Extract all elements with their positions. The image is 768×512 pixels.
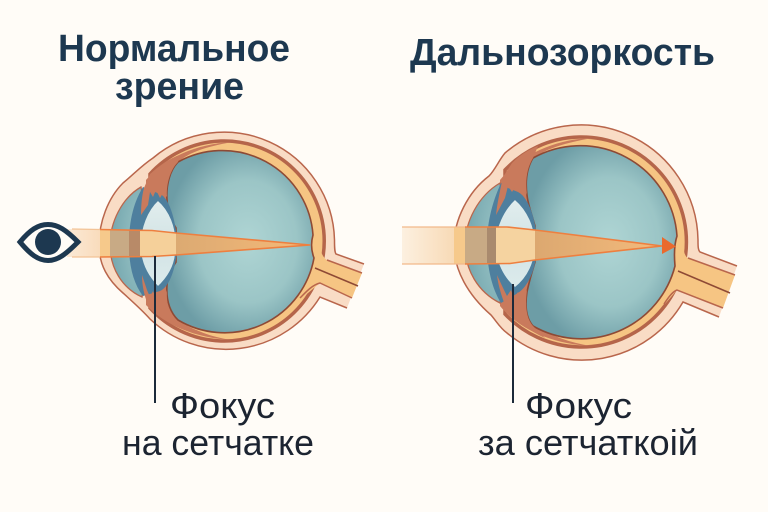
- iris: [129, 187, 177, 296]
- title: farsightedness: Дальнозоркость: [410, 32, 715, 74]
- icon: viewing eye: [20, 224, 78, 260]
- vitreous body: [526, 146, 677, 339]
- optic nerve: [296, 235, 362, 298]
- label: focus behind retina: за сетчаткоій: [478, 422, 698, 463]
- ciliary muscle: upper: [496, 146, 538, 215]
- leader line: normal vision focus: [154, 256, 156, 403]
- light beam: [67, 229, 310, 257]
- ciliary body backing: [500, 138, 592, 346]
- label: focus behind retina: Фокус: [525, 385, 632, 426]
- ciliary muscle: lower: [497, 275, 545, 338]
- label: focus on retina: Фокус: [170, 385, 275, 426]
- sclera: [99, 132, 364, 349]
- choroid ring: [505, 137, 686, 347]
- ciliary muscle: lower: [142, 275, 185, 330]
- cornea and aqueous humour: [110, 187, 150, 297]
- lens: [495, 199, 535, 288]
- leader line: farsightedness focus: [512, 284, 514, 403]
- lens: [140, 200, 176, 287]
- ciliary body backing: [146, 142, 232, 340]
- choroid ring: [150, 141, 324, 341]
- title: normal vision: Нормальное: [58, 28, 290, 70]
- ciliary muscle: upper: [141, 155, 180, 215]
- eye diagram: normal vision: [67, 132, 364, 349]
- cornea and aqueous humour: [465, 183, 508, 303]
- label: focus behind retina: [478, 385, 698, 463]
- sclera: [454, 125, 737, 360]
- optic nerve: [655, 235, 735, 308]
- vitreous body: [167, 151, 314, 333]
- eye diagram: farsightedness: [402, 125, 737, 360]
- label: focus on retina: [122, 385, 314, 463]
- light beam: [402, 227, 676, 264]
- iris: [487, 183, 537, 303]
- title: normal vision: зрение: [115, 66, 244, 108]
- title: normal vision: [58, 28, 290, 108]
- focus arrowhead: [662, 237, 676, 254]
- label: focus on retina: на сетчатке: [122, 422, 314, 463]
